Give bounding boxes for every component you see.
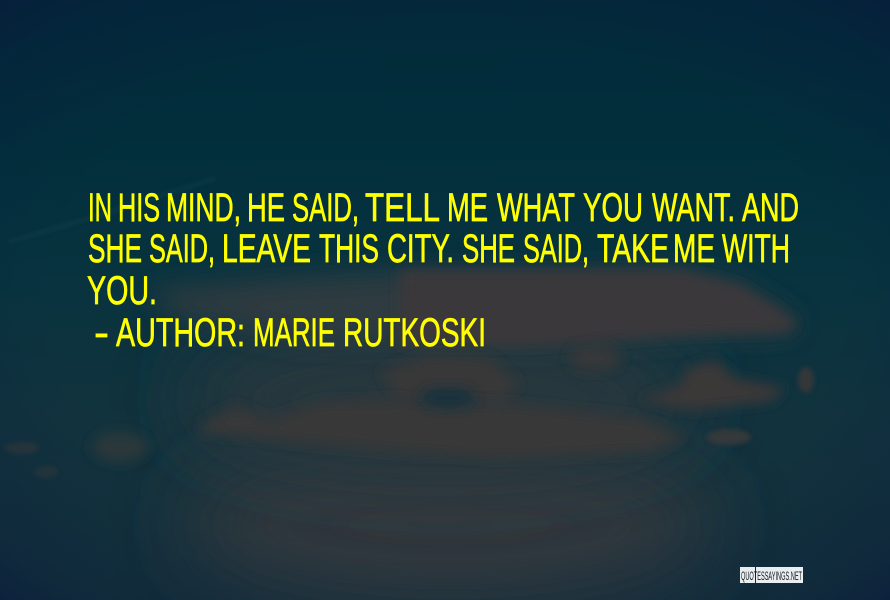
quote text: THIS (319, 227, 379, 271)
quote text: SAID, (149, 227, 215, 271)
quote text: CITY. (387, 227, 454, 271)
quote text: ME (673, 227, 715, 271)
quote text: SHE (88, 227, 142, 271)
watermark logo (740, 567, 803, 583)
quote text: TELL (365, 186, 440, 230)
quote text: SAID, (292, 186, 359, 230)
quote text: MIND, (166, 186, 241, 230)
quote text: IN (88, 186, 112, 230)
author attribution (94, 311, 486, 355)
quote text (87, 186, 799, 313)
author attribution: MARIE (253, 311, 335, 355)
quote text: HIS (118, 186, 160, 230)
quote text: HE (247, 186, 285, 230)
quote text: WITH (722, 227, 790, 271)
background: clouds (5, 178, 814, 600)
quote text: ME (447, 186, 488, 230)
quote text: YOU (583, 186, 643, 230)
author attribution: AUTHOR: (116, 311, 245, 355)
quote text: LEAVE (222, 227, 311, 271)
quote text: WHAT (497, 186, 575, 230)
quote text: SHE (462, 227, 515, 271)
author attribution: - (94, 311, 109, 355)
quote text: TAKE (597, 227, 669, 271)
quote text: AND (742, 186, 799, 230)
text: QUOTESSAYINGS.NET (741, 569, 802, 583)
quote text: SAID, (523, 227, 589, 271)
quote text: WANT. (652, 186, 735, 230)
author attribution: RUTKOSKI (343, 311, 486, 355)
quote text: YOU. (87, 269, 157, 313)
